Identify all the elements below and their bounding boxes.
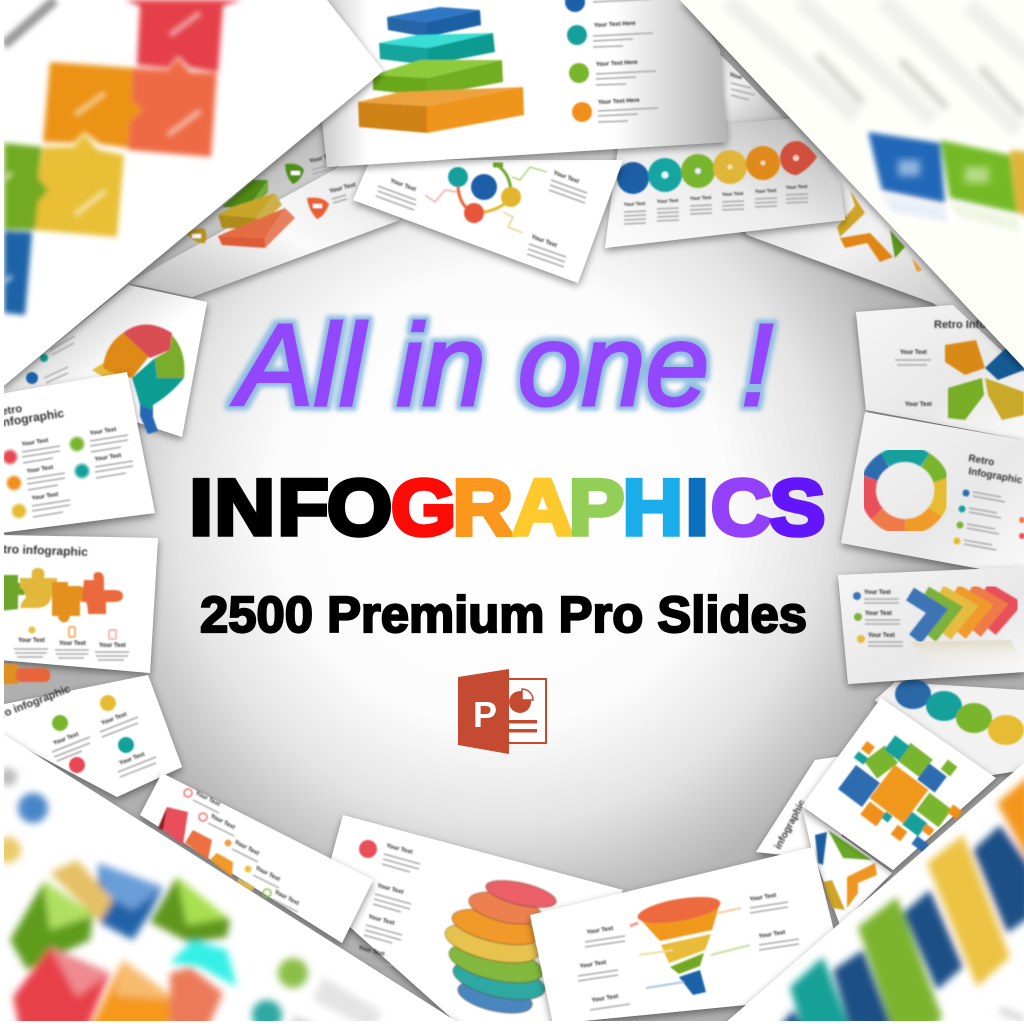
text list: Your Text <box>385 843 413 856</box>
puzzle lightbulb <box>26 324 184 434</box>
funnel connectors and labels: Your Text <box>586 926 614 936</box>
slide: small stacked pyramid, top left <box>128 150 400 297</box>
title and list <box>0 403 133 518</box>
text list <box>355 840 420 971</box>
heading: INFOGRAPHICS multicolour: F <box>278 464 329 552</box>
title and list: Infographic <box>0 406 65 430</box>
step labels: Your Text <box>273 889 300 907</box>
blurred diagonal bars <box>777 775 1024 1024</box>
blurred puzzle scrap between slides <box>0 664 50 684</box>
chevron slide list: Your Text <box>864 590 891 596</box>
list items: Your Text Here <box>598 98 640 106</box>
slide: right circle row behind squares <box>875 679 1024 780</box>
blurred corner slide: top right blocks <box>680 0 1024 368</box>
heading: INFOGRAPHICS multicolour: O <box>327 464 392 552</box>
list items: Your Text Here <box>596 60 638 68</box>
list items: Your Text Here <box>594 21 636 29</box>
chevron slide list <box>853 590 903 646</box>
funnel connectors and labels <box>578 893 799 1010</box>
slide: stacked ovals <box>320 815 623 1024</box>
heading: INFOGRAPHICS multicolour: P <box>569 464 624 552</box>
blurred corner slide: top left puzzle <box>0 0 383 389</box>
title and 3D cross: Retro Info <box>934 319 986 331</box>
icon: PowerPoint logo <box>458 669 546 754</box>
chevron arrows <box>910 589 1012 639</box>
funnel chart <box>636 892 722 995</box>
subheading: 2500 Premium Pro Slides: 2500 Premium Pro Slides <box>200 586 807 643</box>
heading: INFOGRAPHICS multicolour: H <box>623 464 683 552</box>
node diagram: Your Text <box>552 170 580 185</box>
title and 3D cross <box>895 319 1024 420</box>
blurred cubes <box>0 768 382 1024</box>
node diagram: Your Text <box>389 178 417 193</box>
step labels: Your Text <box>254 865 281 883</box>
title and list: Your Text <box>21 438 49 448</box>
slide: circular arrow ring <box>841 412 1024 577</box>
slide: orange and green square mosaic <box>802 698 996 870</box>
title, puzzle and captions: Your Text <box>99 643 126 649</box>
title and list: Your Text <box>26 465 54 475</box>
puzzle lightbulb: Your <box>43 335 58 347</box>
step labels: Your Text <box>233 839 260 857</box>
text list: Your Text <box>376 883 404 896</box>
slide: text slide behind pyramid at top right <box>700 40 790 130</box>
title and 3D cross: Your Text <box>900 350 927 356</box>
step labels: Your Text <box>209 813 236 831</box>
rotated slide title: infographic <box>773 798 808 851</box>
title, puzzle and captions: tro infographic <box>3 542 88 559</box>
funnel connectors and labels: Your Text <box>591 994 619 1004</box>
circles and captions: Your Text <box>755 188 777 195</box>
title, puzzle and captions: Your Text <box>59 641 86 647</box>
title and circles: ro infographic <box>0 683 72 721</box>
slide: six circle process row <box>605 118 845 248</box>
heading: INFOGRAPHICS multicolour: R <box>453 464 513 552</box>
slide: 3D descending steps <box>140 773 373 943</box>
step labels <box>184 789 300 912</box>
chevron slide list: Your Text <box>865 611 892 617</box>
heading: INFOGRAPHICS multicolour: I <box>686 464 709 552</box>
slide: lightbulb puzzle <box>0 285 207 437</box>
title and circles <box>0 683 156 777</box>
funnel connectors and labels: Your Text <box>758 930 786 940</box>
headline: All in one !: All in one ! <box>231 300 773 430</box>
title and list: etro <box>1 403 23 418</box>
title and 3D cross: Your Text <box>905 402 932 408</box>
heading: INFOGRAPHICS multicolour: N <box>215 464 275 552</box>
title and list: Your Text <box>89 427 117 437</box>
circles and captions: Your Text <box>657 198 679 205</box>
slide: retro infographic with puzzle row <box>0 535 158 673</box>
chevron reflection <box>910 640 1024 668</box>
slide: four block cross <box>856 305 1024 440</box>
chevron slide list: Your Text <box>868 633 895 639</box>
ring of arrows <box>868 454 942 527</box>
blurred text streaks and blocks <box>727 0 1024 232</box>
node diagram: Your Text <box>530 234 558 249</box>
white marks on puzzle pieces <box>4 13 200 282</box>
circles and captions: Your Text <box>690 195 712 202</box>
slide: funnel <box>530 847 850 1024</box>
slide: far right behind, 3D arrow <box>700 150 1024 368</box>
text list: Your Text <box>367 914 395 927</box>
title, puzzle and captions: Your Text <box>18 638 45 644</box>
step labels: Your Text <box>194 790 221 808</box>
ring slide title and legend: Infographic <box>967 466 1023 486</box>
slide: circular connected nodes <box>353 160 623 283</box>
title, puzzle and captions <box>0 542 129 660</box>
title and circles: Your Text <box>119 752 146 767</box>
circles and captions: Your Text <box>786 184 808 191</box>
circles and captions: Your Text <box>624 201 646 208</box>
blurred corner slide: bottom left cubes <box>0 732 470 1024</box>
heading: INFOGRAPHICS multicolour: G <box>391 464 456 552</box>
list items <box>565 0 658 122</box>
slide: retro infographic with four circles <box>0 675 182 797</box>
soft icon highlights on blocks <box>898 160 989 183</box>
step bars <box>158 807 255 893</box>
mosaic squares <box>838 735 963 852</box>
funnel connectors and labels: Your Text <box>579 960 607 970</box>
heading: INFOGRAPHICS multicolour: S <box>769 464 825 552</box>
oval stack <box>441 875 559 1019</box>
circles and captions <box>617 141 817 224</box>
title and list: Your Text <box>94 453 122 463</box>
pyramid and icons: Your Text <box>329 182 356 195</box>
slide: 3D star <box>802 807 892 925</box>
heading: INFOGRAPHICS multicolour: C <box>711 464 771 552</box>
pyramid and icons <box>186 152 356 248</box>
slide: chevrons <box>838 567 1024 684</box>
slide: rotated infographic title behind <box>756 750 882 860</box>
heading: INFOGRAPHICS multicolour: I <box>190 464 213 552</box>
title and list: Your Text <box>31 492 59 502</box>
3D layered pyramid <box>358 7 524 133</box>
circles and captions: Your Text <box>722 191 744 198</box>
funnel connectors and labels: Your Text <box>749 893 777 903</box>
3D arrow shape <box>837 190 922 272</box>
node diagram <box>376 165 587 267</box>
title and circles: Your Text <box>101 712 128 727</box>
pyramid and icons: Your Text <box>309 152 336 165</box>
title and circles: Your Text <box>53 732 80 747</box>
blurred corner slide: bottom right bars <box>724 763 1024 1024</box>
slide: retro infographic with five circles <box>0 372 155 533</box>
coloured blocks with reflections <box>868 132 1024 232</box>
text list: Your Text <box>357 945 385 958</box>
3D star shape <box>815 830 877 910</box>
circles row <box>895 679 1024 745</box>
ring slide title and legend: Retro <box>967 453 995 468</box>
ring slide title and legend <box>954 453 1024 550</box>
heading: INFOGRAPHICS multicolour: A <box>512 464 573 552</box>
tiny slide caption: Your <box>728 72 743 82</box>
slide: large 3D pyramid with list <box>320 0 727 167</box>
blurred coloured blocks <box>4 0 242 315</box>
icon: PowerPoint logo: P <box>473 694 497 735</box>
